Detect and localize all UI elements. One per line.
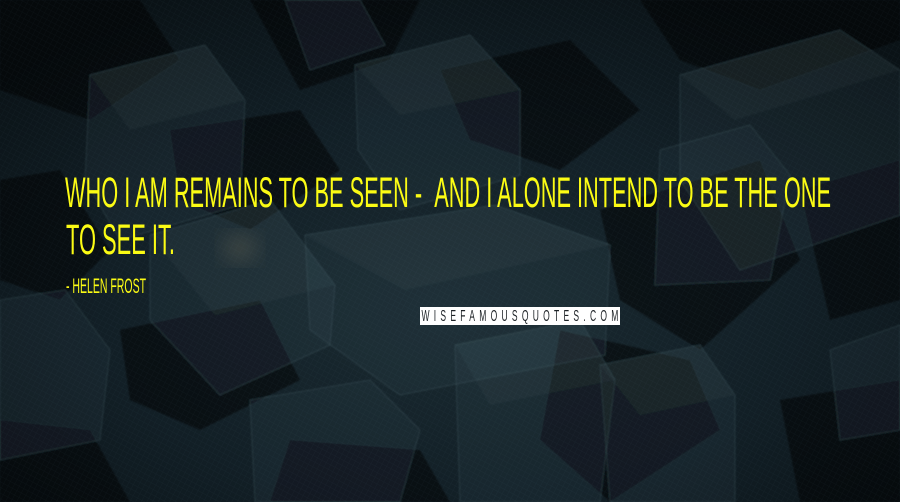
background: faint warm glow: [222, 234, 258, 262]
author attribution: - HELEN FROST: [66, 275, 146, 298]
logo: wisefamousquotes.com: WISEFAMOUSQUOTES.COM: [422, 307, 618, 325]
quote: second line: TO SEE IT.: [66, 216, 175, 264]
